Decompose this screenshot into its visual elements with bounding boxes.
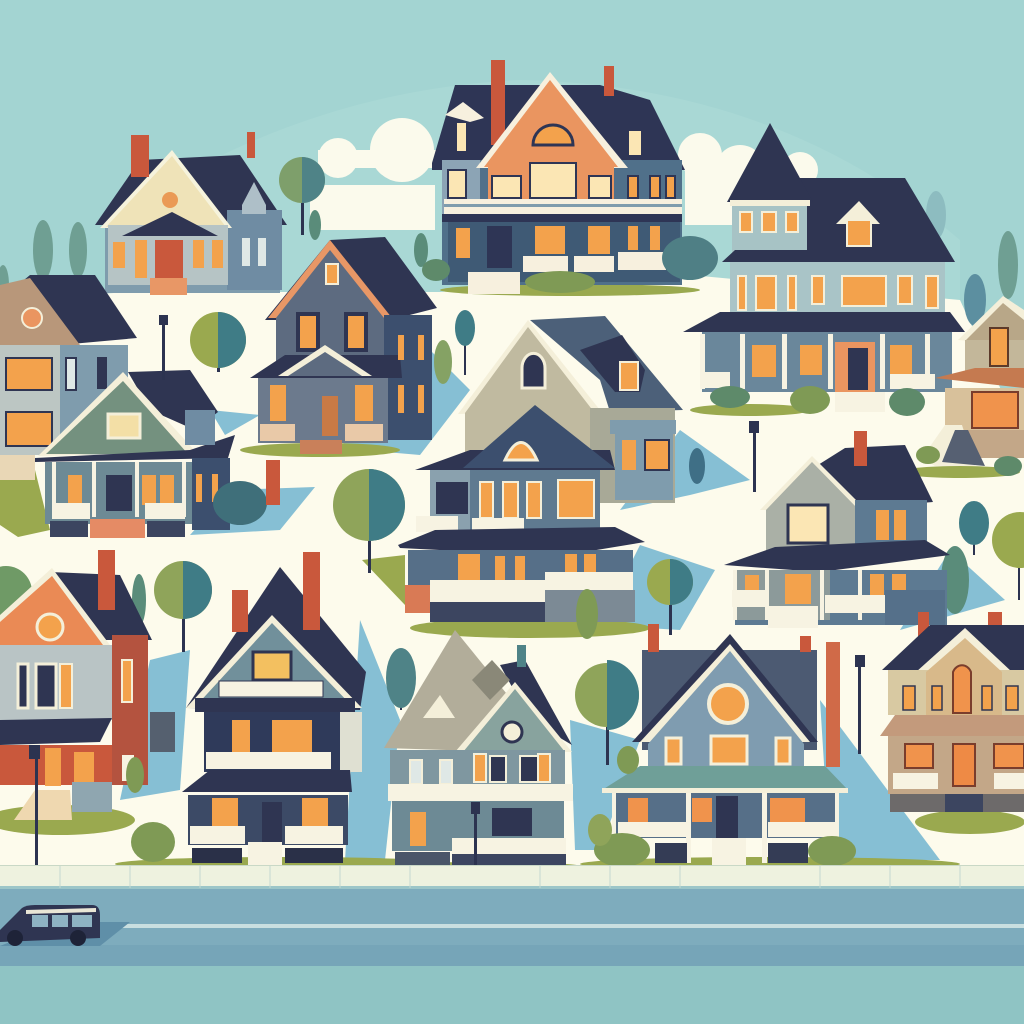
house: center beige <box>458 316 683 503</box>
ground <box>0 275 1024 868</box>
road <box>0 889 1024 966</box>
house: left green low <box>35 370 280 538</box>
clouds <box>310 118 818 230</box>
lamp upper right <box>749 421 759 492</box>
tree small bottom <box>386 648 416 710</box>
lamp lower right <box>855 655 865 754</box>
house: center porch <box>398 405 645 639</box>
tree bottom left <box>154 561 212 652</box>
tree edge left <box>0 566 32 618</box>
house: bottom right <box>880 612 1024 812</box>
trees <box>0 157 1024 765</box>
house: bottom grey <box>384 630 573 867</box>
stairs <box>922 425 975 466</box>
house: bottom blue <box>588 624 856 880</box>
house: center left grey <box>250 237 437 454</box>
distant trees <box>0 191 1018 326</box>
van <box>0 905 100 946</box>
house: top left cream <box>95 132 287 295</box>
tree far right <box>992 512 1024 600</box>
house: bottom left orange <box>0 550 175 820</box>
street lamps <box>29 315 865 890</box>
tree small mid <box>455 310 475 375</box>
sidewalk <box>0 865 1024 889</box>
blue ground shadows <box>120 340 1005 860</box>
shrub trees <box>132 210 969 626</box>
house: top center orange <box>422 60 718 294</box>
tree center left <box>333 469 405 573</box>
tree bottom center <box>575 660 639 765</box>
house: left blue <box>0 275 137 480</box>
lamp upper left <box>159 315 168 380</box>
tree center right <box>647 559 693 635</box>
sky arc glow <box>110 80 960 300</box>
lower verge <box>0 966 1024 1024</box>
tree top left <box>279 157 325 235</box>
house: top right tower <box>683 123 965 416</box>
lamp sidewalk <box>471 802 480 890</box>
tree left mid <box>190 312 246 372</box>
house: bottom navy <box>131 552 366 867</box>
lamp lower left <box>29 745 40 883</box>
tree right <box>959 501 989 555</box>
grass patches <box>0 284 1024 871</box>
house: right grey <box>724 431 950 628</box>
house: far right <box>916 296 1024 476</box>
